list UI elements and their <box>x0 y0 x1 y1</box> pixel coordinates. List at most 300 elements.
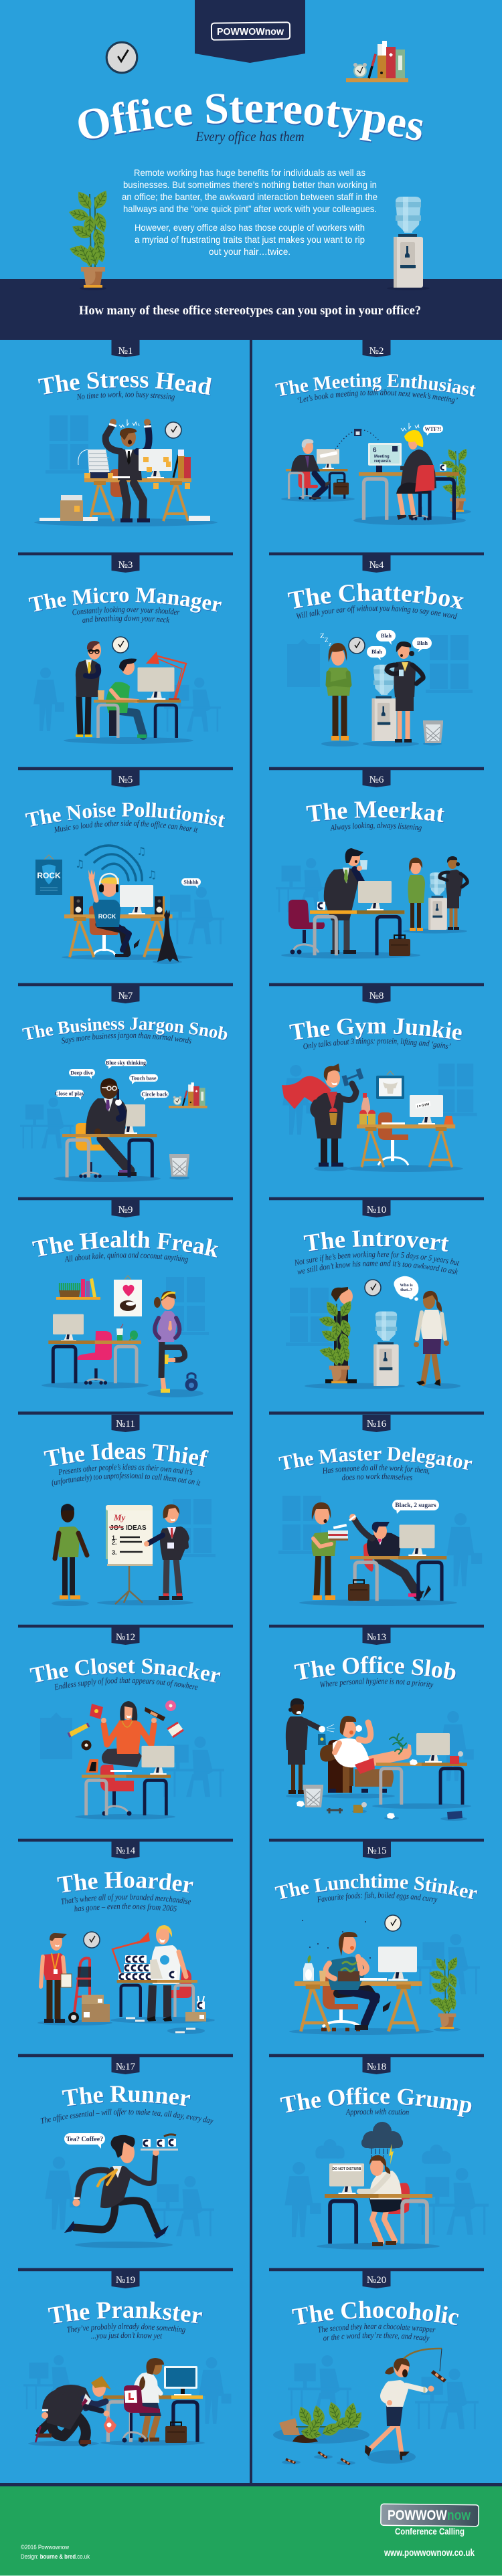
title: The Lunchtime Stinker <box>274 1874 478 1900</box>
music notes: ♫ <box>147 868 157 881</box>
flipchart: 1. <box>112 1534 117 1541</box>
title: The Ideas Thief <box>44 1442 210 1468</box>
shelf with grass and books <box>56 1278 100 1300</box>
orange chair <box>321 1968 360 2029</box>
desk <box>376 1763 467 1805</box>
red chair <box>410 465 434 520</box>
laptop and mug <box>150 1959 177 1979</box>
badge 8: №8 <box>369 991 384 1001</box>
flying snacks <box>68 1700 183 1750</box>
monitor <box>164 2366 197 2395</box>
icon: clock <box>349 637 365 654</box>
badge 2 <box>363 340 391 357</box>
badge 9 <box>111 1200 139 1217</box>
headphones man: ROCK <box>98 913 116 920</box>
bunny mug <box>197 1996 205 2009</box>
badge 15: №15 <box>367 1846 387 1856</box>
young worker <box>106 659 147 738</box>
title: The Office Slob <box>294 1656 456 1680</box>
title: The Introvert <box>304 1231 450 1252</box>
stink wisps <box>390 1734 406 1754</box>
orange chair <box>76 1123 106 1178</box>
intro paragraph one: hallways and the “one quick pint” after work with your colleagues. <box>123 203 377 214</box>
small man at desk <box>286 439 347 500</box>
title: The Chocoholic <box>290 2296 461 2331</box>
meeting requests monitor: requests <box>374 460 392 464</box>
desk <box>295 1981 422 2032</box>
panel: The Chatterbox <box>287 555 473 747</box>
badge 10 <box>363 1200 391 1217</box>
kettlebell <box>185 1373 198 1391</box>
monitor with sticker: I ♥ GYM <box>417 1102 430 1109</box>
speech bubble: Shhhh: Shhhh <box>183 879 199 886</box>
paper stack <box>78 450 130 478</box>
conference calling: Conference Calling <box>395 2526 465 2537</box>
slob <box>333 1716 412 1774</box>
icon: clock <box>385 1915 401 1931</box>
subtitle: Will talk your ear off without you having to say one word <box>296 605 458 619</box>
cooler <box>372 665 396 741</box>
icon: wall clock <box>106 42 137 73</box>
title: The Business Jargon Snob <box>22 1017 228 1041</box>
music notes: ♫ <box>137 845 146 858</box>
red chair <box>166 1969 191 1998</box>
thought bubble: that..? <box>400 1288 412 1292</box>
title: The Runner <box>62 2086 191 2107</box>
bin <box>423 720 443 743</box>
subtitle line one: That’s where all of your branded merchandise <box>61 1894 191 1904</box>
badge 14: №14 <box>116 1846 136 1856</box>
maroon chair with L plate <box>122 2385 160 2443</box>
badge 12 <box>111 1627 139 1645</box>
speech bubbles: Blah <box>371 649 383 655</box>
title: The Stress Head <box>37 372 212 396</box>
badge 20: №20 <box>367 2275 386 2286</box>
illustration <box>40 1700 224 1819</box>
jargon speech bubbles: Deep dive <box>70 1070 93 1076</box>
title: The Chatterbox <box>288 583 465 610</box>
thought bubble <box>394 1276 418 1301</box>
illustration <box>20 1059 207 1182</box>
badge 3 <box>111 555 139 573</box>
briefcase <box>333 480 349 494</box>
monitor <box>142 1746 174 1775</box>
milk bottle <box>303 1955 314 1981</box>
illustration <box>276 848 467 959</box>
illustration <box>286 1276 461 1389</box>
footer logo <box>381 2504 479 2527</box>
badge 3: №3 <box>118 560 133 571</box>
books <box>173 450 191 478</box>
title: The Office Grump <box>278 2082 475 2118</box>
woman at desk <box>133 2358 164 2442</box>
badge 16: №16 <box>367 1419 387 1429</box>
monitor with note <box>329 2163 364 2194</box>
flipchart: My <box>113 1512 126 1522</box>
title: The Hoarder <box>57 1872 194 1893</box>
tray with cups <box>141 2135 178 2151</box>
Zzz: Z <box>329 642 331 648</box>
red chair <box>388 2183 410 2214</box>
header panel <box>0 0 502 340</box>
briefcase <box>348 1580 369 1601</box>
badge 4: №4 <box>369 560 384 571</box>
meerkat man <box>324 848 367 954</box>
title: The Master Delegator <box>278 1447 473 1470</box>
question heading: How many of these office stereotypes can you spot in your office? <box>79 304 421 318</box>
picture frame <box>86 1759 98 1773</box>
flipchart: 2. <box>112 1539 117 1546</box>
badge 20 <box>363 2271 391 2288</box>
subtitle line two: has gone – even the ones from 2005 <box>74 1903 177 1912</box>
subtitle: Endless supply of food that appears out of nowhere <box>55 1677 198 1690</box>
yoga woman <box>154 1291 185 1393</box>
rock poster <box>35 855 62 895</box>
illustration <box>52 1499 216 1606</box>
panel: The Hoarder <box>37 1842 215 2034</box>
subtitle line two: (unfortunately) too unprofessional to call them out on it <box>52 1472 201 1487</box>
jargon speech bubbles: Close of play <box>55 1090 84 1097</box>
prankster kneeling <box>35 2376 111 2444</box>
desk <box>103 2395 203 2442</box>
chair <box>89 906 118 955</box>
subtitle line one: The second they hear a chocolate wrapper <box>317 2322 436 2335</box>
monitor <box>378 1947 417 1981</box>
badge 6: №6 <box>369 775 384 785</box>
title: Office Stereotypes <box>78 94 423 143</box>
illustration <box>37 1925 215 2034</box>
illustration <box>289 1915 480 2035</box>
desk <box>310 902 404 955</box>
hiding man behind plant <box>318 1287 357 1383</box>
panel: The Office Slob <box>285 1627 474 1821</box>
illustration <box>35 845 224 964</box>
desk <box>357 1124 455 1167</box>
subtitle line two: ...you just don’t know yet <box>91 2331 163 2341</box>
icon: plant <box>68 188 111 290</box>
desk <box>84 478 191 521</box>
protein shakers <box>359 1093 375 1125</box>
desk <box>350 1556 446 1601</box>
panel: The Business Jargon Snob <box>20 986 228 1182</box>
panel: The Gym Junkie <box>282 986 477 1172</box>
idea owner <box>55 1504 87 1599</box>
subtitle line one: Has someone do all the work for them, <box>323 1464 430 1474</box>
picture frame <box>444 1116 454 1125</box>
badge 19: №19 <box>116 2275 135 2286</box>
badge 2: №2 <box>369 346 384 357</box>
subtitle line one: Constantly looking over your shoulder <box>72 606 179 615</box>
assistant <box>311 1502 336 1600</box>
centre divider <box>250 340 252 2484</box>
running woman <box>365 2358 434 2460</box>
panel: The Stress Head <box>34 340 218 526</box>
grumpy woman <box>359 2155 402 2246</box>
intro paragraph one: an office; the banter, the awkward interaction between staff in the <box>122 191 378 202</box>
intro paragraph two <box>135 222 365 257</box>
badge 13 <box>363 1627 391 1645</box>
music notes: ♫ <box>75 858 84 870</box>
title: The Prankster <box>47 2296 204 2329</box>
pink chair <box>78 1331 112 1385</box>
panel: The Chocoholic <box>273 2271 479 2466</box>
badge 19 <box>111 2271 139 2288</box>
desk <box>48 1341 141 1383</box>
badge 11 <box>111 1415 139 1432</box>
speech bubble: Tea? Coffee? <box>64 2133 105 2149</box>
delivery man <box>41 1933 72 2023</box>
subtitle: No time to work, too busy stressing <box>77 391 175 401</box>
stinker person <box>326 1932 391 2030</box>
panel: The Ideas Thief <box>44 1415 216 1606</box>
flipchart <box>106 1505 153 1604</box>
panel: The Introvert <box>286 1200 461 1389</box>
illustration <box>34 415 218 526</box>
illustration <box>287 630 473 747</box>
box and paper piles <box>39 495 210 521</box>
title: The Meerkat <box>306 801 445 823</box>
Zzz: Z <box>320 632 325 640</box>
intro paragraph one: Remote working has huge benefits for individuals as well as <box>134 167 365 178</box>
icon: clock <box>165 422 181 438</box>
subtitle line two: we still don’t know his name and it’s too awkward to ask <box>297 1260 458 1275</box>
title: The Noise Pollutionist <box>25 802 226 828</box>
panel: The Health Freak <box>32 1200 219 1397</box>
intro paragraph one <box>122 167 378 214</box>
muscle poster <box>376 1071 404 1099</box>
running man <box>64 2135 169 2239</box>
red chair <box>363 1543 373 1572</box>
badge 16 <box>363 1415 391 1432</box>
briefcase <box>165 2422 187 2443</box>
woman's plant <box>441 447 469 512</box>
fallen plant <box>279 2400 365 2443</box>
storm cloud <box>361 2122 403 2165</box>
badge 1: №1 <box>118 346 133 357</box>
badge 17: №17 <box>116 2062 136 2072</box>
pens <box>126 2018 195 2032</box>
badge 18: №18 <box>367 2062 386 2072</box>
subtitle line one: They’ve probably already done something <box>66 2322 186 2335</box>
headphones man <box>88 870 140 957</box>
bin and rubbish <box>297 1751 463 1819</box>
illustration <box>23 2355 231 2446</box>
cooler <box>373 1311 399 1386</box>
subtitle: Every office has them <box>195 128 304 144</box>
dotted arc and calendar <box>335 429 380 450</box>
stress marks <box>401 423 419 431</box>
guitar <box>157 910 179 962</box>
title: The Micro Manager <box>28 587 222 613</box>
chatty woman <box>387 641 423 742</box>
speech bubble: Shhhh <box>181 878 201 888</box>
badge 14 <box>111 1842 139 1859</box>
monitor <box>112 1104 145 1134</box>
monitor <box>120 885 153 914</box>
boss <box>349 1514 431 1599</box>
icon: clock <box>112 637 129 653</box>
jargon speech bubbles <box>55 1059 169 1100</box>
Zzz: Z <box>325 637 328 643</box>
subtitle: Where personal hygiene is not a priority <box>320 1678 434 1689</box>
desk <box>117 1980 197 2017</box>
monitor <box>416 1733 450 1763</box>
desk <box>94 700 181 738</box>
jargon speech bubbles: Touch base <box>131 1076 157 1081</box>
panel: The Micro Manager <box>28 555 222 744</box>
badge 12: №12 <box>116 1632 135 1643</box>
green shirt colleague <box>408 858 425 931</box>
panel: The Closet Snacker <box>29 1627 224 1819</box>
panel: The Runner <box>40 2057 214 2248</box>
panel: The Prankster <box>23 2271 232 2447</box>
badge 4 <box>363 555 391 573</box>
mug <box>440 464 446 471</box>
speech bubbles <box>367 630 432 660</box>
drink and broccoli <box>116 1324 138 1342</box>
navy floor band <box>0 279 502 340</box>
ribbon with logo <box>195 0 305 63</box>
briefcase <box>389 935 410 956</box>
badge 9: №9 <box>118 1205 133 1215</box>
rock poster: ROCK <box>37 871 61 880</box>
website: www.powwownow.co.uk <box>384 2547 475 2559</box>
fishing rod and chocolate bar <box>404 2349 448 2383</box>
speech bubbles: Blah <box>417 640 428 646</box>
flies <box>303 1920 370 1959</box>
jargon speech bubbles: Circle back <box>141 1092 168 1097</box>
speech bubble: Black, 2 sugars <box>395 1502 436 1509</box>
badge 18 <box>363 2057 391 2074</box>
lamp <box>112 1932 150 1980</box>
section rules <box>18 554 484 2270</box>
subtitle: ‘Let’s book a meeting to talk about next week’s meeting’ <box>297 389 458 404</box>
badge 7: №7 <box>118 991 133 1001</box>
illustration <box>281 423 471 525</box>
panel: The Meeting Enthusiast <box>275 340 477 525</box>
illustration <box>284 2122 489 2250</box>
badge 5: №5 <box>118 775 133 785</box>
badge 17 <box>111 2057 139 2074</box>
armchair <box>320 1740 394 1793</box>
manager <box>76 641 101 737</box>
badge 10: №10 <box>367 1205 386 1215</box>
hand truck and boxes <box>68 1958 110 2023</box>
copyright: ©2016 Powwownow <box>21 2544 69 2551</box>
desk <box>62 1134 157 1177</box>
monitor <box>358 881 392 910</box>
panel: The Meerkat <box>276 770 469 959</box>
footer band <box>0 2483 502 2576</box>
badge 5 <box>111 770 139 787</box>
woman <box>440 856 467 930</box>
blonde woman <box>396 430 436 520</box>
speakers <box>70 896 165 914</box>
desk <box>82 1775 171 1815</box>
subtitle: Favourite foods: fish, boiled eggs and curry <box>317 1892 438 1904</box>
left monitor <box>317 449 339 469</box>
monitor with sticker <box>410 1095 443 1124</box>
ribbon with logo: POWWOWnow <box>217 26 284 37</box>
panel: The Lunchtime Stinker <box>274 1842 480 2035</box>
subtitle line two: and breathing down your neck <box>82 615 170 623</box>
badge 7 <box>111 986 139 1003</box>
monitor <box>53 1314 84 1341</box>
icon: shelf with books <box>346 41 408 82</box>
icon: water cooler <box>387 197 430 290</box>
flipchart: JO’s IDEAS <box>110 1524 147 1532</box>
intro paragraph two: However, every office also has those couple of workers with <box>135 222 365 233</box>
design credit: Design: bourne & bred.co.uk <box>21 2553 90 2561</box>
illustration <box>286 1698 474 1821</box>
paper pile <box>328 1524 348 1541</box>
panel: The Master Delegator <box>278 1415 482 1606</box>
title: The Health Freak <box>32 1231 219 1258</box>
whoopee cushion <box>104 2416 116 2433</box>
mug pyramid <box>118 1955 153 1981</box>
speech bubble <box>392 1500 439 1514</box>
subtitle: Only talks about 3 things: protein, lifting and ‘gains’ <box>303 1038 451 1050</box>
subtitle: Music so loud the other side of the office can hear it <box>54 820 198 833</box>
subtitle line one: Not sure if he’s been working here for 5 days or 5 years but <box>295 1251 459 1266</box>
music notes <box>75 845 157 881</box>
illustration <box>45 2133 214 2248</box>
subtitle line one: Presents other people’s ideas as their own and it’s <box>59 1464 193 1475</box>
badge 8 <box>363 986 391 1003</box>
meeting requests monitor <box>368 443 402 472</box>
bored man <box>327 643 351 740</box>
intro paragraph two: out your hair…twice. <box>209 246 290 257</box>
badge 1 <box>111 340 139 357</box>
illustration <box>278 1496 482 1606</box>
footer logo: POWWOWnow <box>388 2508 471 2523</box>
badge 15 <box>363 1842 391 1859</box>
monitor <box>399 1524 435 1556</box>
panel: The Noise Pollutionist <box>25 770 226 964</box>
thought bubble: Who is <box>400 1283 413 1288</box>
red chair <box>100 1765 134 1815</box>
bin <box>169 1154 189 1177</box>
thief <box>144 1504 189 1600</box>
panel: The Office Grump <box>280 2057 489 2250</box>
icon: clock <box>365 1280 381 1296</box>
coffee cup <box>98 690 104 701</box>
snacker woman <box>101 1701 157 1767</box>
meeting requests monitor: Meeting <box>374 455 390 459</box>
intro paragraph two: a myriad of frustrating traits that just makes you want to rip <box>135 234 365 245</box>
title: The Gym Junkie <box>289 1018 463 1041</box>
jargon man <box>86 1078 137 1176</box>
speech bubble: Tea? Coffee?: Tea? Coffee? <box>66 2136 103 2143</box>
subtitle: Always looking, always listening <box>331 822 422 832</box>
monitor with note: DO NOT DISTURB <box>332 2167 361 2171</box>
lamp <box>146 652 186 700</box>
plant <box>428 1955 461 2029</box>
meeting requests monitor: 6 <box>373 447 377 454</box>
monitor <box>138 668 174 700</box>
jargon speech bubbles: Blue sky thinking <box>106 1060 146 1066</box>
illustration <box>273 2349 479 2466</box>
speech bubbles: Blah <box>381 633 392 639</box>
coffee cup <box>319 1971 326 1981</box>
subtitle line two: does no work themselves <box>342 1473 412 1480</box>
speech bubble: WTF?!: WTF?! <box>425 426 441 432</box>
subtitle: The office essential – will offer to make tea, all day, every day <box>40 2108 214 2124</box>
subtitle line two: or the c word they’re there, and ready <box>323 2331 430 2343</box>
badge 13: №13 <box>367 1632 386 1643</box>
flipchart: 3. <box>112 1549 117 1556</box>
Zzz <box>320 632 331 648</box>
